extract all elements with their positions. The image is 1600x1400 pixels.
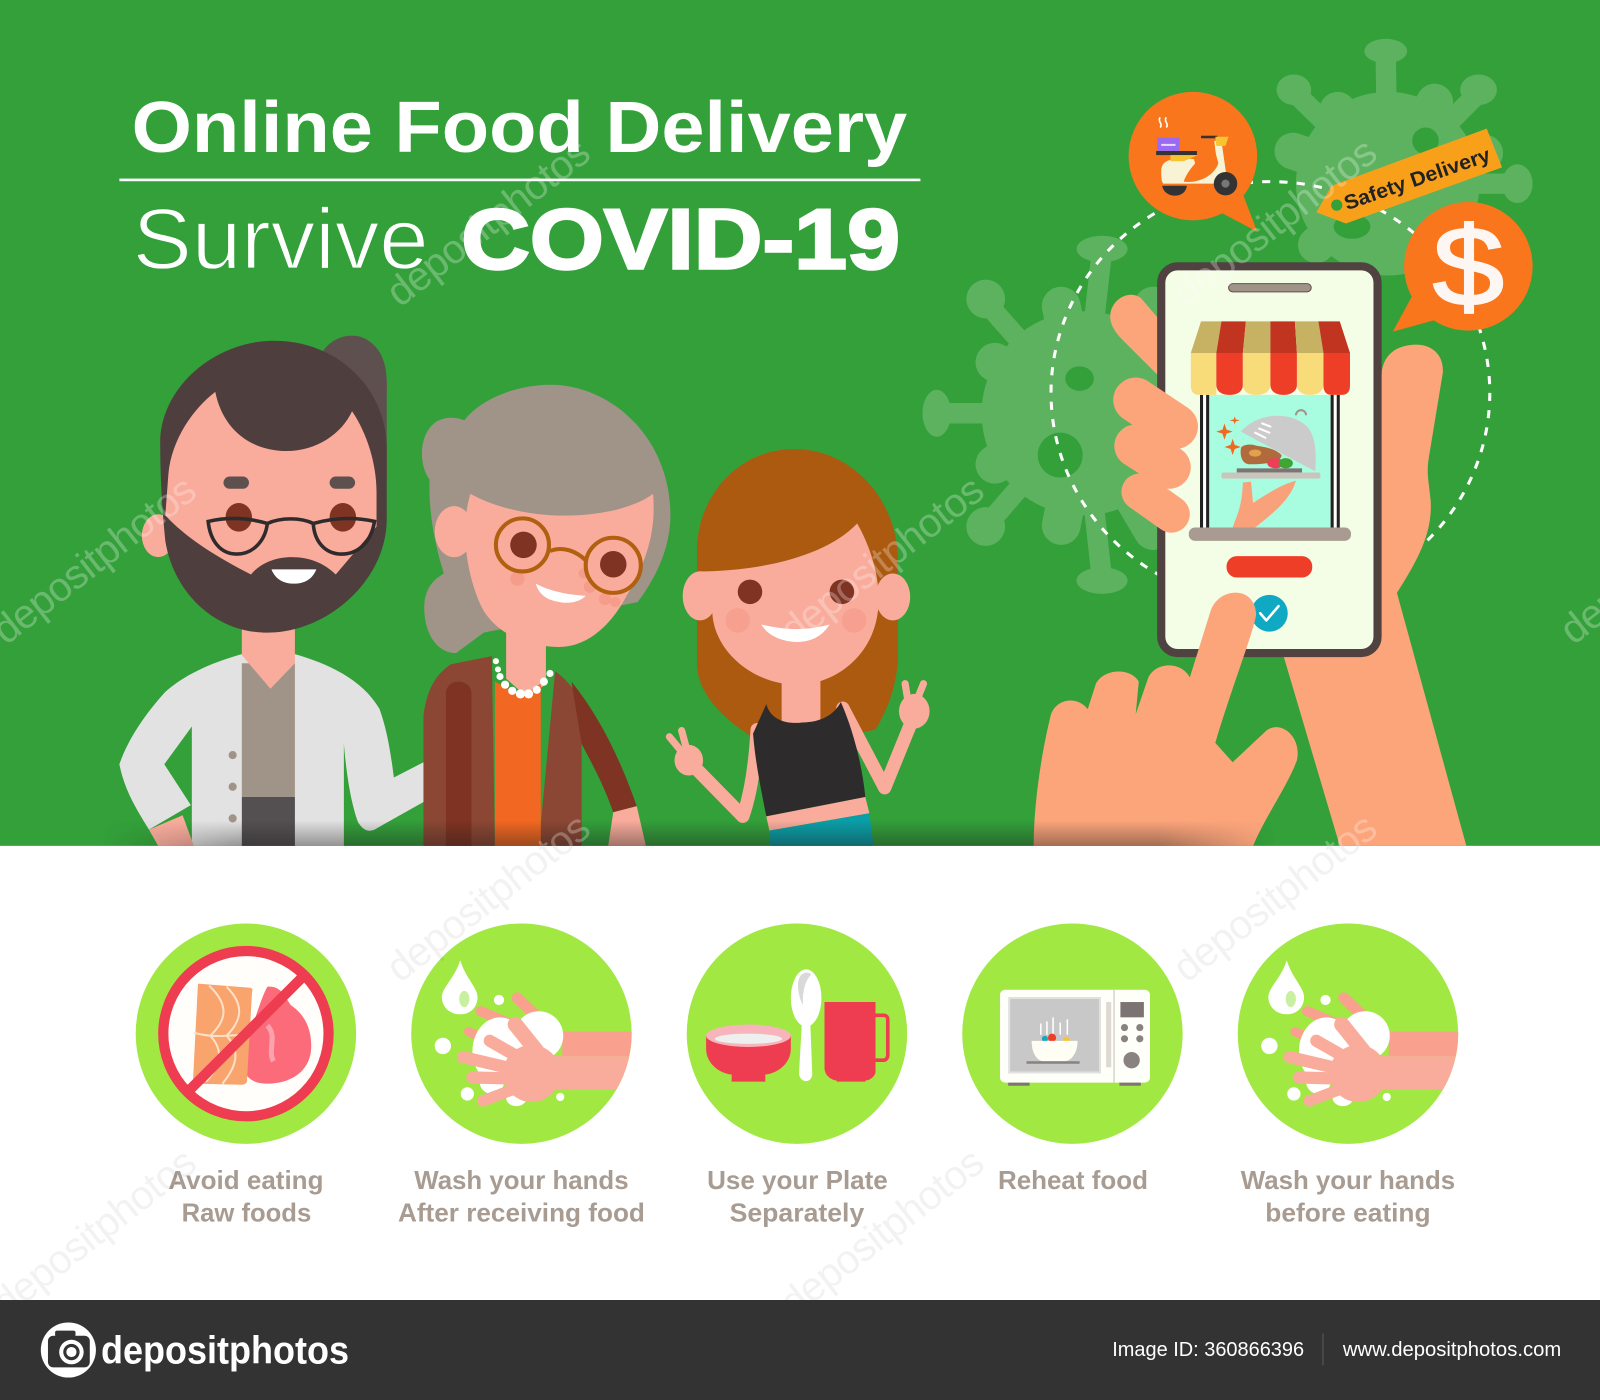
tee shirt (242, 663, 295, 797)
shop counter (1189, 528, 1351, 541)
label: After receiving food (398, 1199, 645, 1227)
eyebrows (223, 477, 355, 489)
virus: left background (922, 236, 1186, 594)
freckles (510, 568, 620, 607)
check badge (1251, 595, 1288, 632)
tip 4: reheat food (962, 923, 1183, 1195)
ears (683, 571, 910, 620)
neck (506, 633, 546, 696)
label: Use your Plate (707, 1167, 888, 1195)
arms (691, 708, 911, 816)
label: Raw foods (182, 1199, 311, 1227)
tip 1: avoid raw foods (136, 923, 356, 1227)
trousers (242, 797, 295, 846)
watermarks: depositphotos (1164, 804, 1385, 991)
website: www.depositphotos.com (1342, 1339, 1561, 1361)
white disc (163, 951, 329, 1116)
hand washing icon (1261, 960, 1460, 1106)
scooter (1161, 141, 1228, 184)
hair (422, 385, 670, 653)
tray (1237, 468, 1302, 472)
hand (149, 815, 194, 846)
cheeks (726, 608, 866, 633)
label: before eating (1265, 1199, 1431, 1227)
hand: fingers behind phone (1110, 295, 1159, 377)
salmon fillet (193, 984, 252, 1085)
sleeve (571, 682, 637, 812)
title rule (119, 179, 920, 181)
neck (782, 673, 820, 733)
eyes (510, 532, 627, 578)
red order button (1227, 556, 1312, 578)
label: Wash your hands (1241, 1167, 1455, 1195)
back hair (697, 449, 898, 750)
logo wordmark: depositphotos (101, 1329, 349, 1372)
shop window (1209, 395, 1331, 528)
prohibition ring (163, 951, 329, 1116)
label (707, 1167, 888, 1227)
heading: online food delivery: Online Food Delivery (132, 87, 907, 168)
face (165, 392, 377, 574)
delivery box (1157, 138, 1180, 151)
tip 3: use your plate separately (687, 923, 907, 1227)
bubble: dollar price (1393, 202, 1533, 332)
tip 2: wash hands after receiving food (398, 923, 645, 1227)
green circle (136, 923, 356, 1144)
phone body (1161, 266, 1378, 653)
sleeves (554, 1032, 632, 1090)
cardigan shading (446, 682, 471, 846)
hand: pointing finger (1034, 593, 1298, 846)
logo icon: camera (41, 1322, 96, 1378)
hand: fingers over phone (1136, 400, 1176, 514)
heading: covid-19: COVID-19 (461, 191, 900, 287)
price tag: safety delivery (1316, 129, 1502, 223)
green circle (1238, 923, 1458, 1144)
spoon (791, 969, 821, 1081)
glasses (496, 518, 641, 593)
front hand (463, 1024, 560, 1102)
green circle (962, 923, 1183, 1144)
teal trousers (769, 813, 873, 846)
hair bun (322, 336, 387, 480)
panel: green header background (0, 0, 1600, 846)
image id: Image ID: 360866396 (1112, 1339, 1304, 1361)
glasses (208, 518, 374, 554)
pearl necklace (493, 658, 554, 698)
watermarks: depositphotos (377, 804, 599, 991)
orange top (495, 682, 541, 846)
hand (608, 806, 646, 846)
dollar sign: $ (1433, 203, 1504, 329)
label: Separately (730, 1199, 865, 1227)
steam (1041, 1017, 1067, 1035)
green circle (687, 923, 907, 1144)
awning (1191, 321, 1350, 395)
buttons (229, 751, 237, 822)
title (119, 87, 920, 287)
bottom shadow fade (122, 823, 1258, 846)
bubble: delivery scooter (1129, 92, 1257, 232)
microwave (1000, 990, 1150, 1086)
face (698, 523, 879, 685)
hands (674, 694, 930, 776)
footer bar (0, 1300, 1600, 1400)
mouth (271, 569, 316, 584)
eyes (738, 580, 854, 604)
label (168, 1167, 323, 1227)
watermarks: depositphotos (1164, 804, 1385, 991)
character: girl (669, 449, 930, 846)
character: grandmother (422, 385, 670, 846)
back hand fingers (468, 998, 541, 1039)
coat (119, 654, 423, 846)
ear (435, 506, 473, 557)
eyes (226, 503, 356, 532)
shop posts (1200, 395, 1340, 528)
dashed orbit circle (1051, 182, 1490, 604)
steak (1241, 444, 1282, 464)
character: bearded man (119, 336, 423, 846)
face (465, 494, 654, 647)
food bowl (1042, 1036, 1048, 1042)
hand: holding phone arm (1283, 345, 1466, 846)
panel: white tips background (0, 846, 1600, 1300)
midriff (766, 797, 869, 831)
heading: survive: Survive (133, 190, 429, 287)
mug (824, 1002, 888, 1082)
tag label: Safety Delivery (1341, 144, 1494, 215)
speaker (1229, 284, 1311, 292)
watermarks: depositphotos (771, 466, 992, 653)
peace fingers (669, 684, 923, 760)
mouth (761, 624, 830, 642)
label: Avoid eating (168, 1167, 323, 1195)
foam (472, 1011, 563, 1106)
label (1241, 1167, 1455, 1227)
steam (1159, 117, 1167, 128)
mouth (536, 584, 586, 603)
label: Wash your hands (414, 1167, 629, 1195)
neck (242, 612, 295, 689)
water drop (442, 960, 478, 1014)
food tray icon (1216, 410, 1320, 528)
watermarks: depositphotos (377, 804, 599, 991)
garnish (1267, 458, 1284, 468)
tip 5: wash hands before eating (1238, 923, 1460, 1227)
watermarks: depositphotos (377, 128, 599, 315)
watermarks: depositphotos (1164, 128, 1385, 315)
black tank top (753, 702, 865, 816)
hair and beard (160, 341, 387, 633)
server hand (1233, 481, 1296, 528)
cloche (1241, 416, 1316, 471)
smartphone (1161, 266, 1378, 653)
virus: top right background (1277, 39, 1533, 276)
raw meat (245, 987, 311, 1084)
bowl (706, 1024, 791, 1082)
label (398, 1167, 645, 1227)
ear (142, 514, 174, 557)
green circle (411, 923, 632, 1144)
watermarks: depositphotos (771, 1138, 992, 1325)
label: Reheat food (998, 1167, 1148, 1195)
sparkles (1216, 416, 1241, 455)
soap bubbles (435, 995, 564, 1101)
cardigan (423, 656, 582, 846)
